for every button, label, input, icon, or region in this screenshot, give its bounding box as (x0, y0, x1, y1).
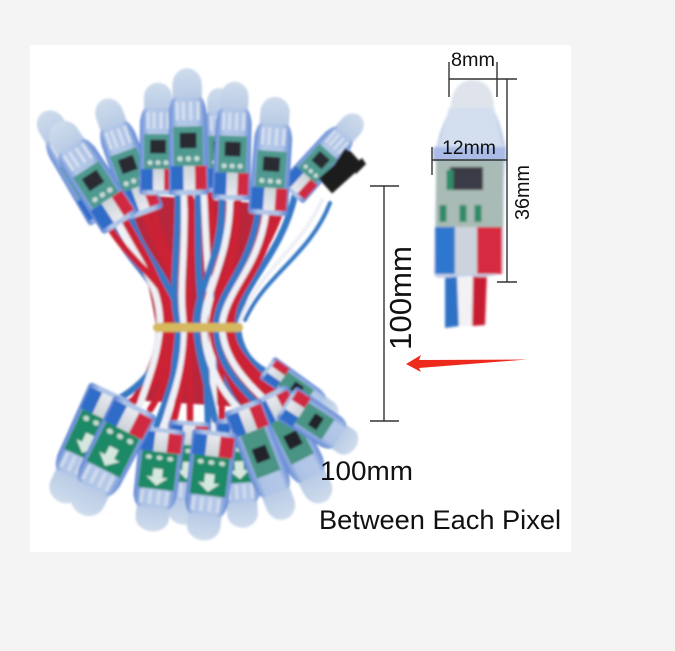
chip (450, 167, 483, 190)
yellow rubber band (153, 323, 243, 332)
body (434, 108, 506, 278)
label: 36mm: 36mm (512, 165, 534, 220)
label: 8mm: 8mm (451, 50, 495, 71)
head (450, 80, 494, 110)
label: 12mm: 12mm (442, 138, 496, 159)
circuit board (436, 160, 503, 227)
white image panel (30, 45, 571, 552)
red stripe (477, 227, 502, 274)
board pads (443, 170, 478, 222)
bottom pixel modules (39, 356, 366, 543)
caption: Between Each Pixel: Between Each Pixel (319, 505, 561, 535)
label: 100mm spacing: 100mm (320, 456, 413, 486)
vertical label: 100mm: 100mm (383, 246, 418, 350)
lens shoulder (438, 108, 503, 150)
blue stripe (435, 227, 455, 274)
front wires (108, 193, 290, 433)
100mm length dimension line (370, 186, 399, 421)
connector with white and blue leads (319, 148, 366, 193)
close-up dimension lines (432, 62, 517, 282)
top pixel modules (27, 68, 372, 235)
red arrow (406, 355, 527, 372)
white stripe (455, 227, 477, 274)
wires (445, 272, 487, 328)
close-up of single pixel (433, 80, 506, 328)
back wires (110, 195, 330, 428)
LED pixel string bundle (27, 68, 372, 543)
blue band (433, 147, 506, 161)
